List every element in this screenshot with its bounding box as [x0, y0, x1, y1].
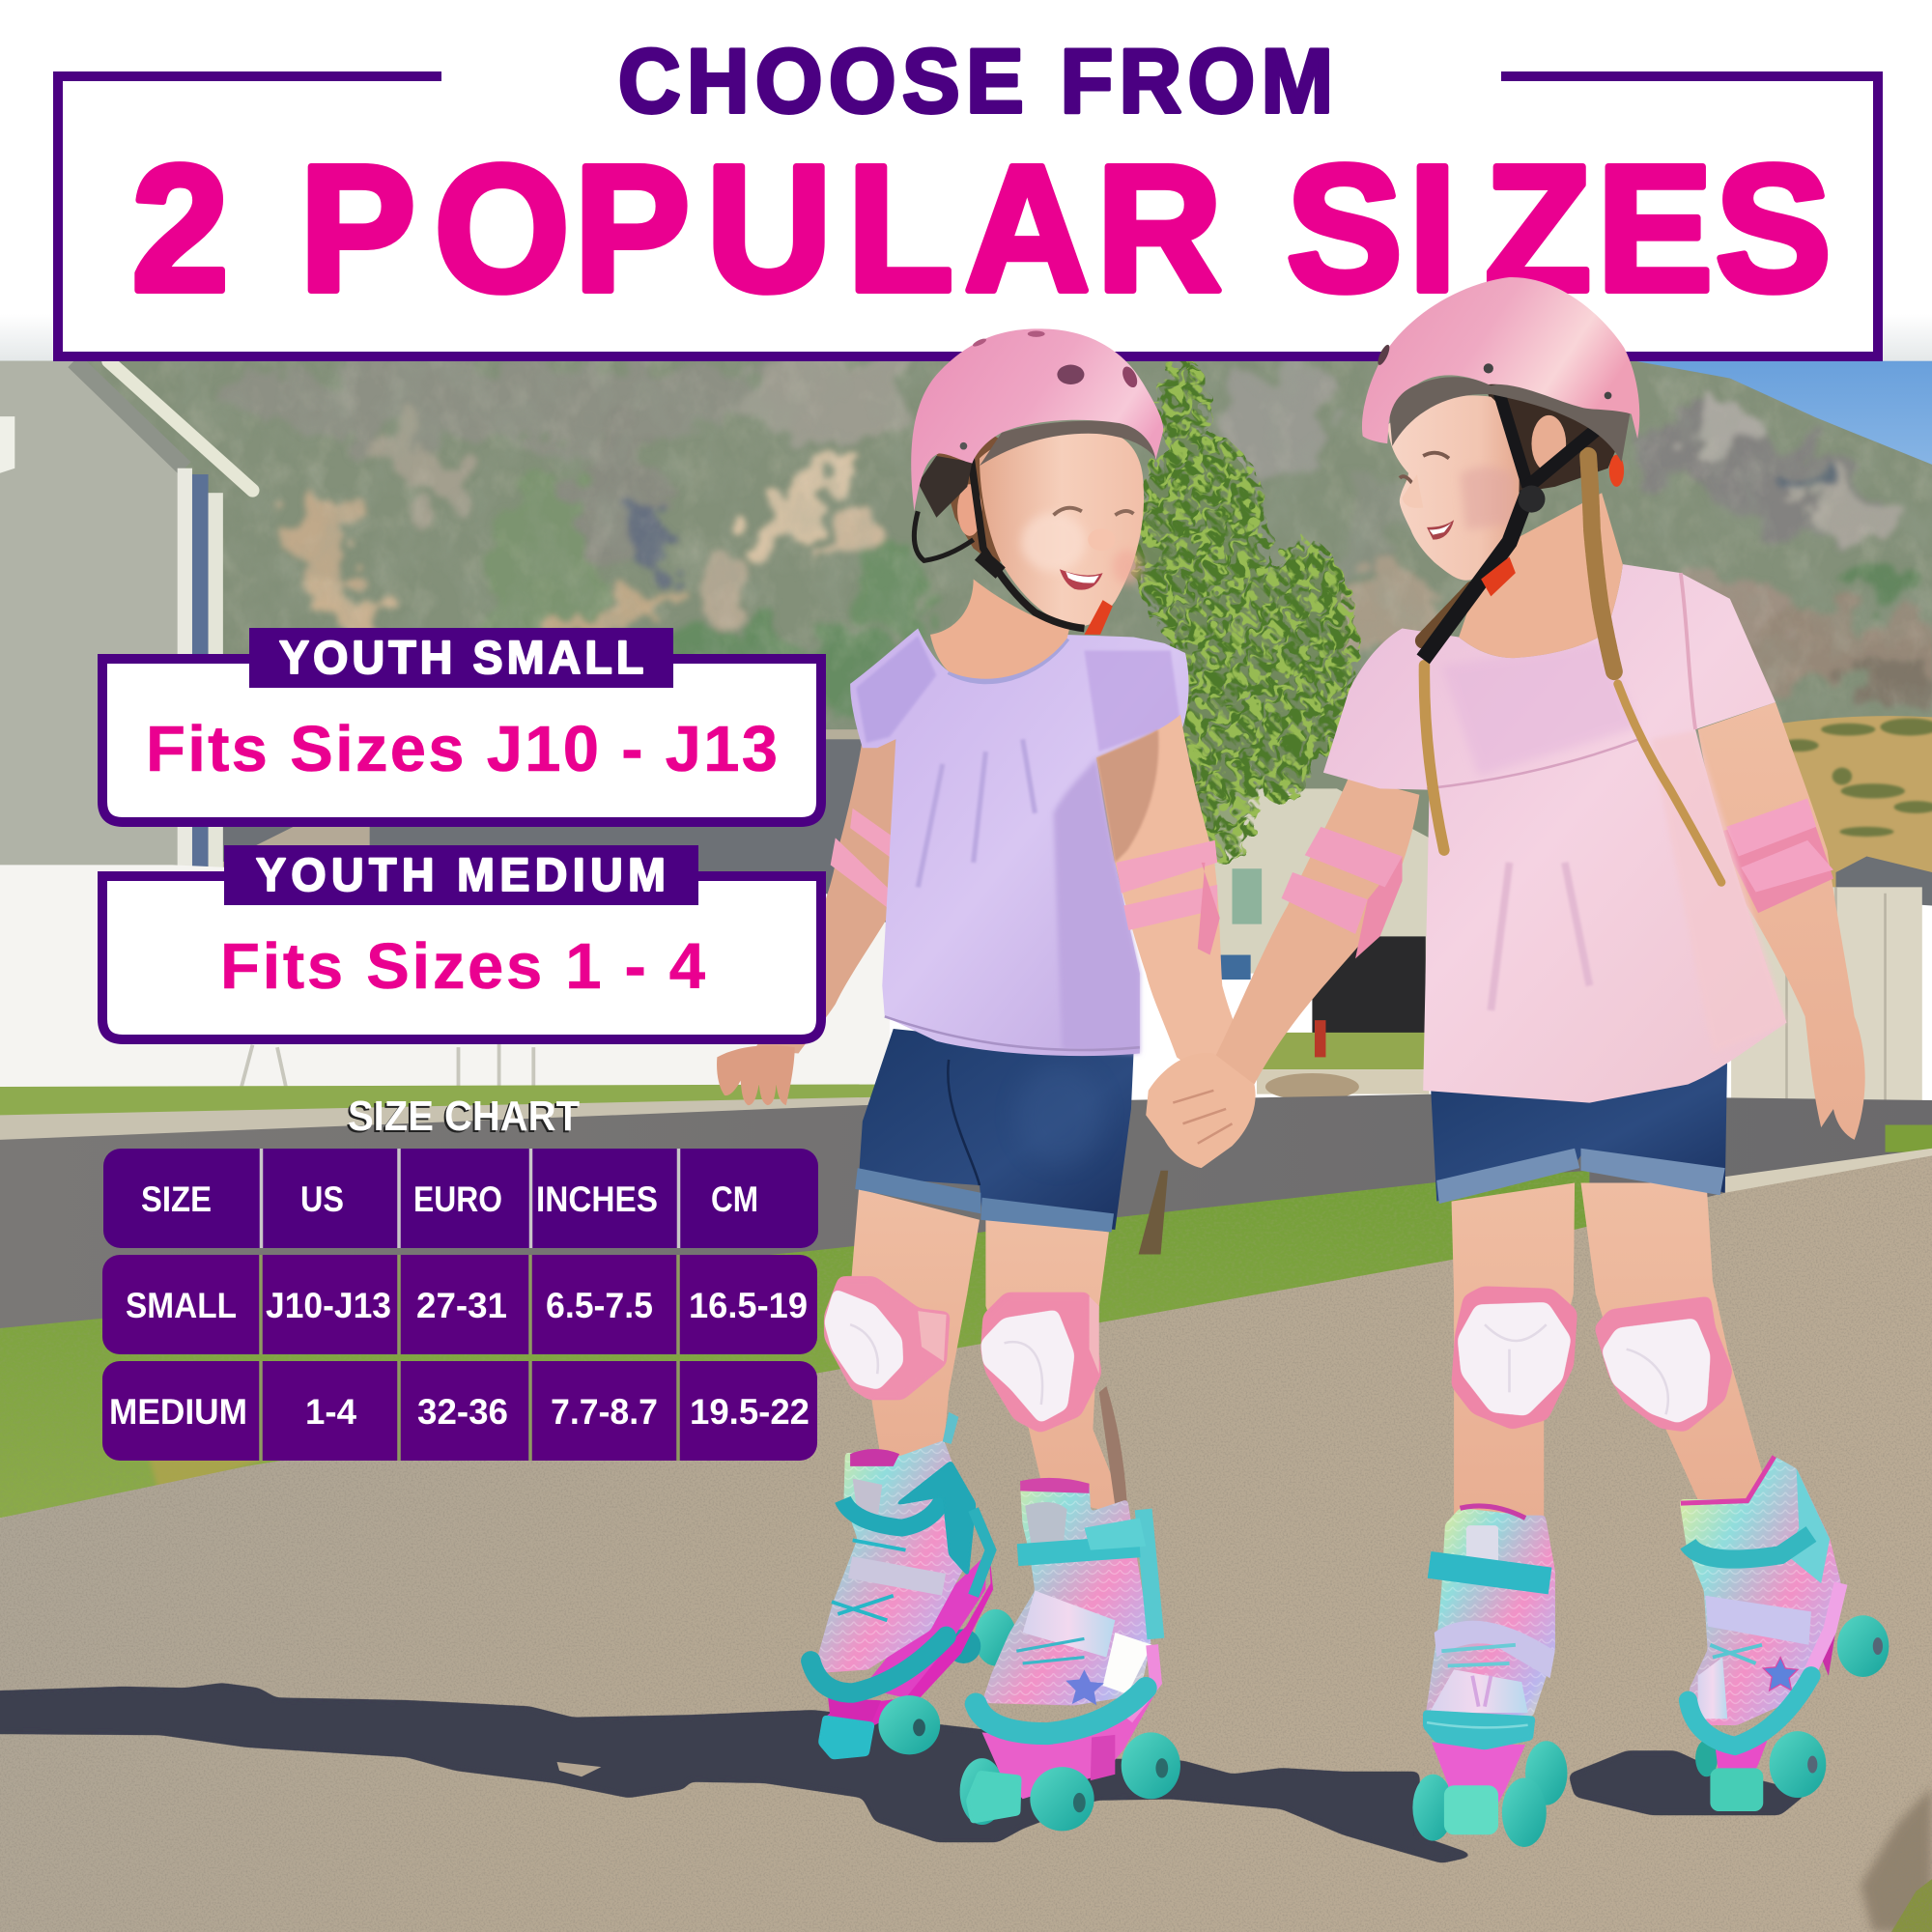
near arm [1213, 777, 1419, 1084]
denim shorts [855, 1029, 1133, 1233]
panel: youth medium [102, 845, 821, 1039]
face [957, 429, 1144, 626]
table row: small: 16.5-19 [689, 1286, 808, 1325]
table row: header: US [300, 1179, 344, 1219]
neck [1459, 493, 1623, 658]
table row: header: CM [711, 1179, 758, 1219]
far arm and hand [717, 739, 895, 1105]
table row: header: SIZE [141, 1179, 212, 1219]
house with roof trim [0, 361, 252, 868]
girl right [1146, 277, 1889, 1847]
pink shirt [1323, 564, 1786, 1103]
table row: small: 6.5-7.5 [546, 1286, 653, 1325]
photo foreground: two girls on roller skates [717, 277, 1889, 1847]
table row: medium: 19.5-22 [690, 1392, 810, 1432]
text: fits sizes J10 - J13: Fits Sizes J10 - J13 [146, 713, 778, 785]
tab: youth medium: YOUTH MEDIUM [256, 849, 666, 901]
size chart title: SIZE CHART [348, 1093, 580, 1140]
legs [1452, 1182, 1770, 1523]
road, curb and near grass [0, 1084, 1932, 1521]
helmet [1362, 277, 1639, 462]
table row: medium: 7.7-8.7 [551, 1392, 658, 1432]
size chart table [102, 1149, 818, 1461]
helmet [911, 328, 1163, 518]
face [1387, 395, 1566, 581]
tab: youth small: YOUTH SMALL [279, 632, 643, 684]
sunlit gap in shadow [557, 1762, 601, 1776]
legs [850, 1189, 1127, 1516]
header background [0, 0, 1932, 367]
near arm [1096, 715, 1254, 1084]
mid buildings [210, 729, 1932, 1035]
table row: medium: MEDIUM [109, 1392, 247, 1432]
table row: header: INCHES [536, 1179, 658, 1219]
knee pads [1452, 1287, 1732, 1432]
straps [914, 458, 1084, 629]
golden hill with bushes [1756, 716, 1932, 887]
table row: medium: 1-4 [305, 1392, 356, 1432]
skate left foot [810, 1412, 1016, 1759]
knee pads [824, 1276, 1101, 1433]
table row: header: EURO [413, 1179, 502, 1219]
hair back [1485, 382, 1627, 493]
ground shadows of skaters [0, 1683, 1807, 1863]
lavender shirt [850, 629, 1189, 1056]
denim shorts [1430, 1047, 1727, 1204]
table row: medium [102, 1361, 817, 1461]
braids [1423, 456, 1721, 882]
straps and buckle [1423, 385, 1624, 659]
neck [930, 579, 1069, 679]
heading: CHOOSE FROM: CHOOSE FROM [618, 31, 1333, 132]
far lawn and hydrant [1257, 1020, 1430, 1100]
asphalt path [0, 1155, 1932, 1932]
mountains [0, 356, 1932, 887]
far arm and hand [1698, 702, 1865, 1140]
header frame [58, 76, 1878, 356]
text: fits sizes 1 - 4: Fits Sizes 1 - 4 [220, 930, 705, 1003]
sky [1577, 361, 1932, 509]
panel: youth small [102, 628, 821, 822]
table row: small: J10-J13 [266, 1286, 391, 1325]
table row: medium: 32-36 [417, 1392, 508, 1432]
hair [936, 431, 1041, 567]
skate fourth [1680, 1457, 1889, 1811]
skate right foot [960, 1478, 1180, 1831]
girl left [717, 328, 1254, 1831]
tree [1132, 357, 1358, 1254]
mailboxes [1731, 887, 1922, 1171]
heading: 2 POPULAR SIZES: 2 POPULAR SIZES [131, 128, 1832, 328]
chin buckle [1084, 600, 1113, 635]
table row: small: SMALL [126, 1286, 237, 1325]
clasped hands [1146, 1053, 1256, 1168]
table row: header [103, 1149, 818, 1248]
table row: small [102, 1255, 817, 1354]
skate third [1412, 1506, 1567, 1847]
white fence [0, 865, 890, 1093]
table row: small: 27-31 [416, 1286, 507, 1325]
size chart title: SIZE CHART [346, 1094, 578, 1142]
